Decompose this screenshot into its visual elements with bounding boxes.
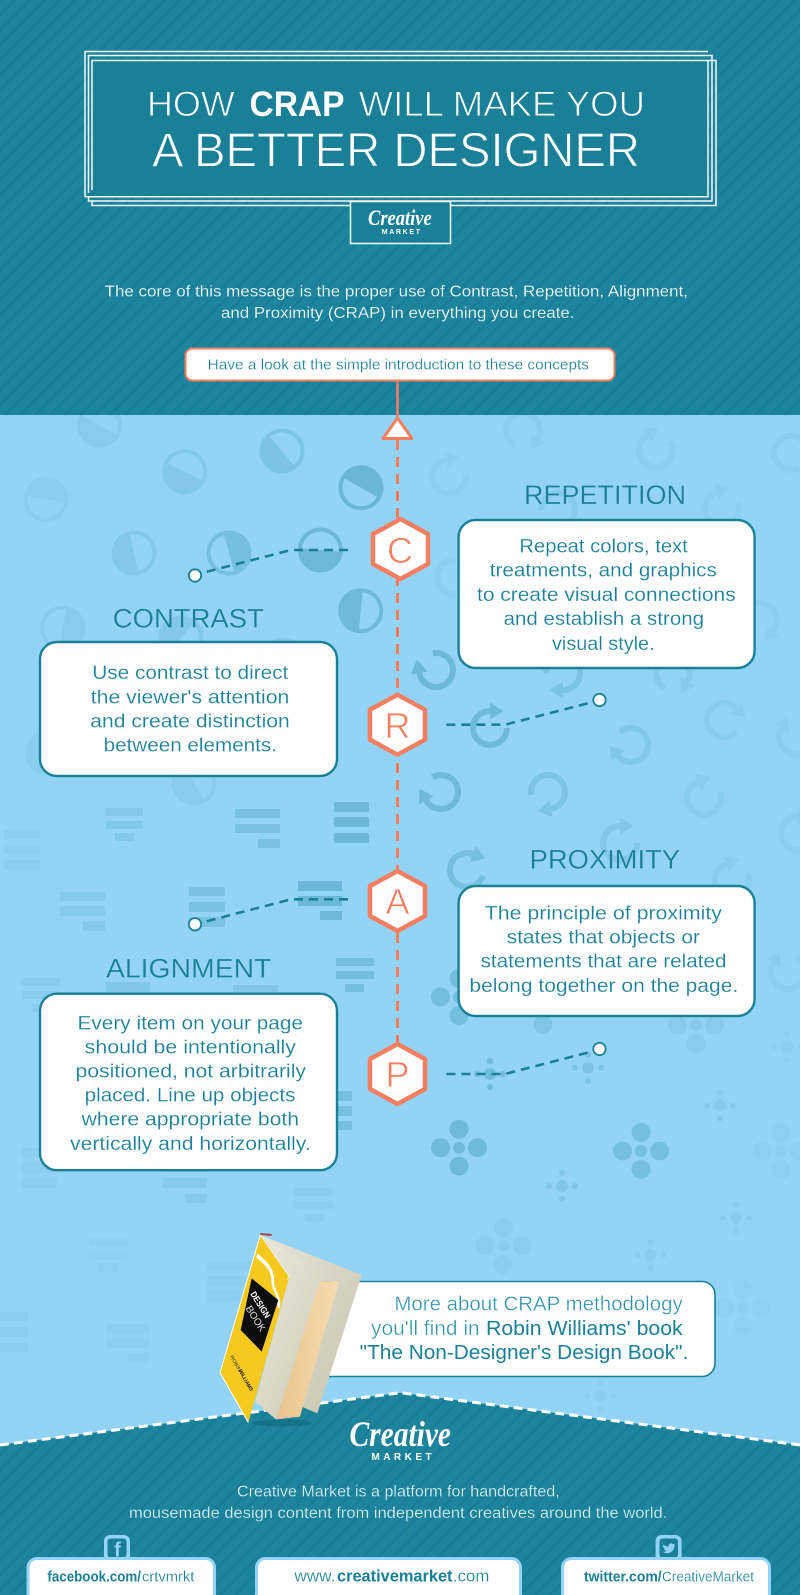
hexagon A: A bbox=[385, 881, 410, 922]
timeline line bbox=[396, 381, 399, 1045]
hexagon R bbox=[370, 695, 425, 755]
hexagon R: R bbox=[384, 705, 410, 746]
icon: book bbox=[220, 1234, 362, 1423]
panel: repetition: treatments, and graphics bbox=[490, 561, 717, 582]
panel: contrast: Use contrast to direct bbox=[92, 663, 289, 684]
link box: website: creativemarket bbox=[337, 1567, 453, 1586]
light blue body background bbox=[0, 415, 800, 1415]
panel: contrast: between elements. bbox=[104, 736, 277, 757]
panel: book callout: More about CRAP methodology bbox=[394, 1294, 683, 1316]
hexagon A bbox=[370, 871, 425, 931]
panel: alignment: should be intentionally bbox=[85, 1037, 297, 1058]
hexagon C: C bbox=[387, 530, 413, 571]
icon: facebook bbox=[104, 1535, 130, 1565]
title: HOW bbox=[147, 85, 235, 124]
logo box: MARKET bbox=[382, 229, 421, 236]
footer background bbox=[0, 1393, 800, 1595]
leader: contrast bbox=[189, 550, 348, 582]
title: WILL MAKE YOU bbox=[359, 85, 645, 124]
icon: book: WILLIAMS bbox=[237, 1369, 254, 1393]
hexagon P bbox=[370, 1044, 425, 1104]
panel: book callout: "The Non-Designer's Design Book". bbox=[360, 1342, 688, 1364]
title frame bbox=[85, 52, 716, 206]
book shadow bbox=[252, 1420, 312, 1426]
link box: website: www. bbox=[293, 1567, 335, 1586]
link box: facebook: facebook.com/ bbox=[47, 1569, 142, 1586]
link box: twitter: CreativeMarket bbox=[662, 1569, 755, 1586]
intro paragraph: and Proximity (CRAP) in everything you create. bbox=[221, 305, 574, 322]
intro paragraph bbox=[105, 284, 688, 322]
header background bbox=[0, 0, 800, 415]
panel: book callout: you'll find in bbox=[371, 1318, 480, 1340]
panel: proximity: states that objects or bbox=[507, 927, 701, 948]
panel: contrast: the viewer's attention bbox=[91, 687, 289, 708]
leader: repetition bbox=[446, 694, 606, 725]
footer logo: Creative bbox=[350, 1414, 451, 1454]
panel: repetition: Repeat colors, text bbox=[519, 537, 689, 558]
leader: proximity bbox=[446, 1043, 606, 1074]
panel: proximity bbox=[459, 886, 755, 1016]
panel: alignment: vertically and horizontally. bbox=[70, 1134, 311, 1155]
title: CRAP bbox=[250, 85, 344, 124]
panel: alignment: placed. Line up objects bbox=[85, 1085, 295, 1106]
panel: proximity: belong together on the page. bbox=[469, 976, 738, 997]
icon: book: ROBIN bbox=[228, 1355, 242, 1373]
heading: alignment: ALIGNMENT bbox=[106, 954, 271, 984]
footer logo: MARKET bbox=[371, 1452, 432, 1463]
logo box: Creative bbox=[368, 205, 432, 230]
heading: contrast: CONTRAST bbox=[113, 603, 264, 633]
link box: twitter bbox=[562, 1558, 770, 1595]
background pattern: alignment bars bbox=[0, 802, 374, 1363]
panel: book callout bbox=[300, 1282, 715, 1376]
panel: alignment: positioned, not arbitrarily bbox=[76, 1061, 307, 1082]
panel: repetition: to create visual connections bbox=[477, 585, 736, 606]
footer text bbox=[129, 1484, 667, 1522]
panel: repetition: and establish a strong bbox=[504, 609, 704, 630]
link box: twitter: twitter.com/ bbox=[584, 1569, 662, 1586]
hexagon P: P bbox=[385, 1054, 410, 1095]
link box: website: .com bbox=[453, 1567, 489, 1586]
link box: facebook bbox=[28, 1558, 214, 1595]
panel: repetition: visual style. bbox=[552, 634, 655, 655]
background pattern: repetition arrows bbox=[408, 407, 800, 995]
icon: twitter bbox=[656, 1535, 682, 1565]
icon: facebook: f bbox=[114, 1540, 121, 1562]
hexagon C bbox=[373, 519, 428, 579]
link box: facebook: crtvmrkt bbox=[142, 1569, 195, 1586]
logo box bbox=[350, 202, 450, 244]
leader: alignment bbox=[189, 899, 348, 930]
link box: website bbox=[256, 1558, 520, 1595]
icon: book: DESIGN bbox=[248, 1290, 272, 1320]
footer text: Creative Market is a platform for handcrafted, bbox=[237, 1484, 560, 1501]
intro pill bbox=[186, 348, 614, 380]
arrow head bbox=[383, 418, 412, 438]
heading: proximity: PROXIMITY bbox=[530, 844, 680, 874]
panel: contrast bbox=[40, 642, 337, 776]
footer logo bbox=[350, 1414, 451, 1463]
panel: alignment: Every item on your page bbox=[78, 1013, 303, 1034]
background pattern: proximity dots bbox=[431, 969, 800, 1412]
icon: book: BOOK bbox=[243, 1304, 267, 1334]
intro pill: Have a look at the simple introduction to these concepts bbox=[208, 356, 589, 373]
panel: contrast: and create distinction bbox=[90, 711, 290, 732]
panel: alignment bbox=[40, 994, 337, 1170]
heading: repetition: REPETITION bbox=[524, 480, 686, 510]
title bbox=[147, 85, 645, 178]
panel: book callout: Robin Williams' book bbox=[486, 1318, 684, 1340]
footer text: mousemade design content from independent creatives around the world. bbox=[129, 1505, 667, 1522]
background pattern: contrast circles bbox=[21, 396, 391, 813]
intro paragraph: The core of this message is the proper use of Contrast, Repetition, Alignment, bbox=[105, 284, 688, 301]
panel: proximity: statements that are related bbox=[481, 951, 726, 972]
panel: proximity: The principle of proximity bbox=[485, 903, 723, 924]
panel: alignment: where appropriate both bbox=[80, 1110, 299, 1131]
panel: repetition bbox=[459, 520, 755, 668]
footer dashed edge bbox=[0, 1393, 800, 1445]
title: A BETTER DESIGNER bbox=[152, 125, 640, 178]
